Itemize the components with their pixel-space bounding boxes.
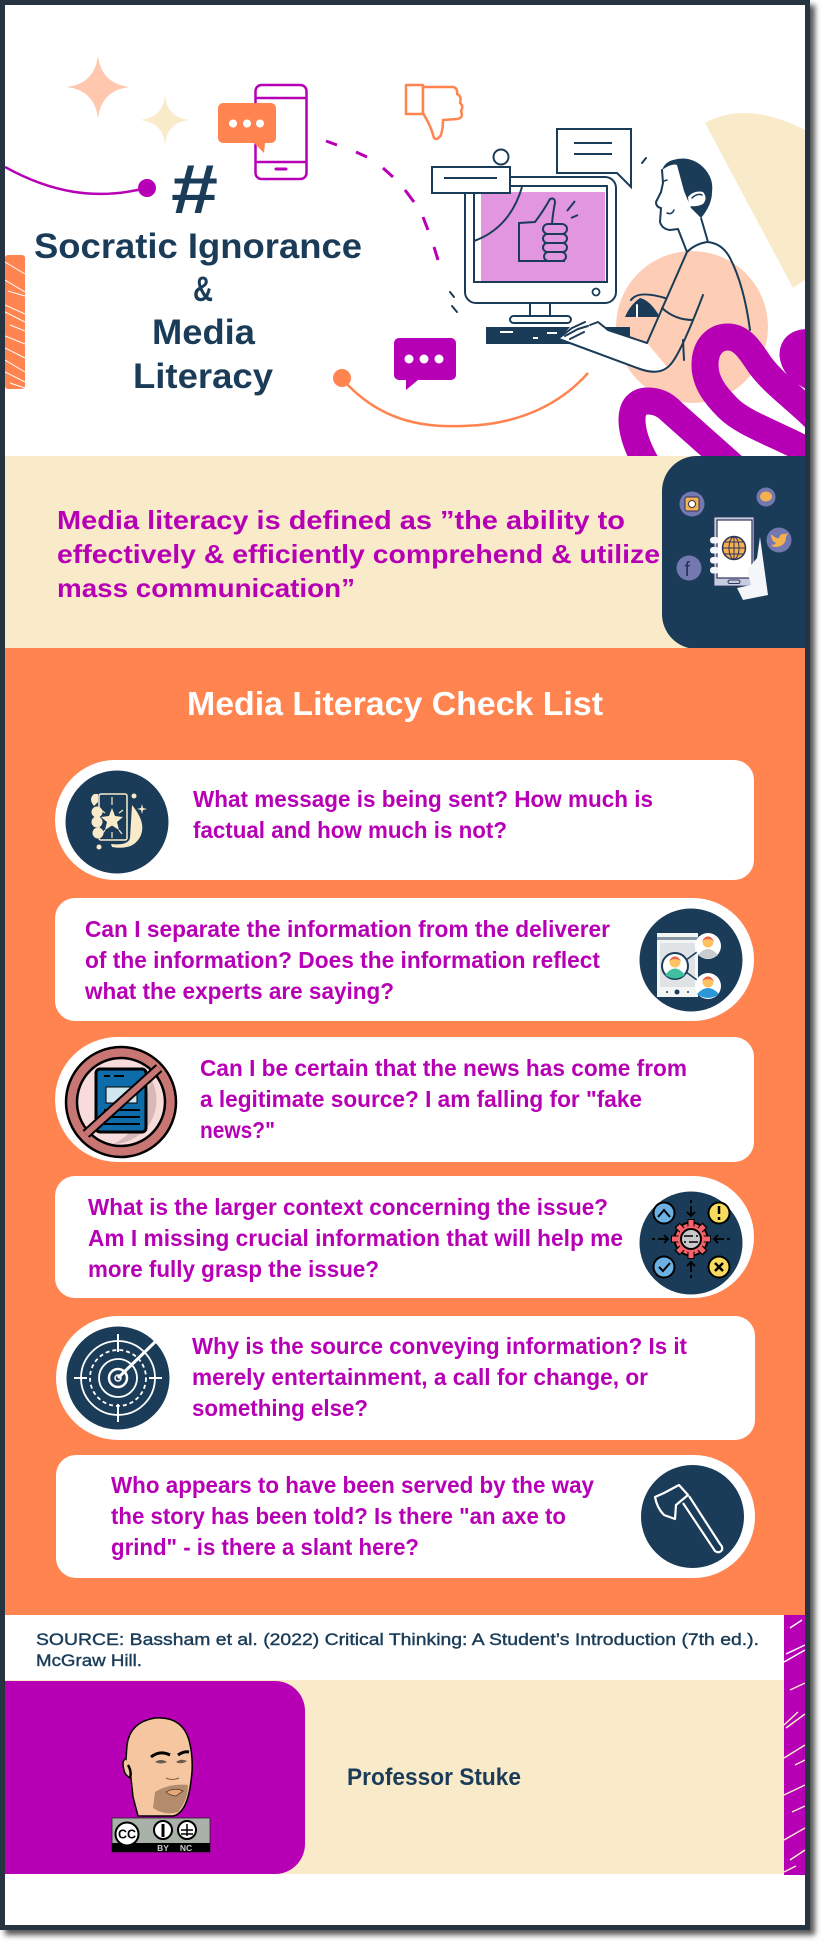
decorative cream wedge [705,113,805,288]
creative commons badge: BY [157,1843,169,1853]
item text [88,1194,623,1282]
item text [192,1333,687,1421]
check item 2 [55,898,754,1021]
illustration: computer monitor [465,177,616,323]
title line 3: Media [152,313,256,352]
item text: What message is being sent? How much is [193,786,653,812]
panel: hero illustration [5,55,815,470]
item text: Who appears to have been served by the way [111,1472,594,1498]
title line 1: Socratic Ignorance [34,227,362,266]
item text [200,1055,687,1143]
icon: no fake news [66,1047,176,1157]
definition text [57,505,660,603]
title [34,150,362,396]
icon: gear and context [652,1200,730,1278]
heading: Media Literacy Check List [187,685,603,722]
item text [84,916,610,1004]
decorative purple scribble [784,1615,805,1875]
icon: axe [655,1485,722,1552]
panel: source citation [36,1630,759,1670]
item text: the story has been told? Is there "an axe to [111,1503,566,1529]
icon: chat [756,488,776,506]
thumbs up on screen [519,198,578,261]
sparkle large [66,55,130,119]
check item 4 [55,1176,754,1298]
creative commons badge: NC [180,1843,192,1853]
speech box [557,129,631,187]
item text [193,786,653,843]
label box on monitor [432,150,510,193]
author panel [5,1681,305,1874]
icon: phone with orange chat bubble [218,85,307,179]
item text: something else? [192,1395,368,1421]
decorative purple squiggles [632,337,815,470]
portrait illustration [123,1718,192,1816]
item text [111,1472,594,1560]
definition text: Media literacy is defined as ”the ability to [57,505,625,535]
author name: Professor Stuke [347,1764,521,1791]
check item 6 [56,1455,755,1578]
icon: thumbs down [406,85,462,139]
phone in hand [710,517,768,600]
peach circle behind person [616,251,768,403]
keyboard [486,327,630,344]
item text: Can I be certain that the news has come from [200,1055,687,1081]
item text: Why is the source conveying information? Is it [192,1333,687,1359]
panel: media literacy check list [5,648,805,1615]
icon panel: social media phone [662,456,805,649]
icon: phone with star [91,794,147,850]
panel: definition band [5,456,805,649]
panel: source citation: McGraw Hill. [36,1651,142,1670]
purple curve with dot [5,167,156,197]
creative commons badge [112,1818,210,1853]
person at computer [450,158,750,372]
item text: merely entertainment, a call for change, or [192,1364,648,1390]
definition text: effectively & efficiently comprehend & utilize [57,539,660,569]
item text: what the experts are saying? [84,978,394,1004]
hash symbol: # [171,150,218,228]
panel: source citation: SOURCE: Bassham et al. (2022) Critical Thinking: A Student’s Introduction (7th ed.). [36,1630,759,1649]
title line 4: Literacy [133,357,274,396]
check item 1 [55,760,754,880]
item text: grind" - is there a slant here? [111,1534,419,1560]
check item 3 [55,1037,754,1162]
item text: more fully grasp the issue? [88,1256,379,1282]
item text: Am I missing crucial information that will help me [88,1225,623,1251]
item text: a legitimate source? I am falling for "fake [200,1086,642,1112]
dashed purple arc arrow [326,141,438,260]
definition text: mass communication” [57,573,355,603]
item text: news?" [200,1117,275,1143]
item text: What is the larger context concerning the issue? [88,1194,608,1220]
icon: target [74,1334,162,1422]
icon: facebook [676,556,702,581]
panel: footer [5,1615,805,1875]
check item 5 [56,1316,755,1440]
icon: instagram [680,492,704,516]
item text: Can I separate the information from the deliverer [85,916,610,942]
item text: of the information? Does the information reflect [85,947,600,973]
item text: factual and how much is not? [193,817,507,843]
decorative orange scribble [5,255,25,389]
icon: facebook: f [684,559,690,581]
icon: purple chat bubble [394,338,456,390]
icon: connected experts [657,933,721,999]
sparkle small [140,95,190,145]
creative commons badge: CC [118,1828,136,1842]
title line 2: & [193,270,213,309]
icon: twitter [766,528,792,552]
orange curve with dot [333,369,588,426]
